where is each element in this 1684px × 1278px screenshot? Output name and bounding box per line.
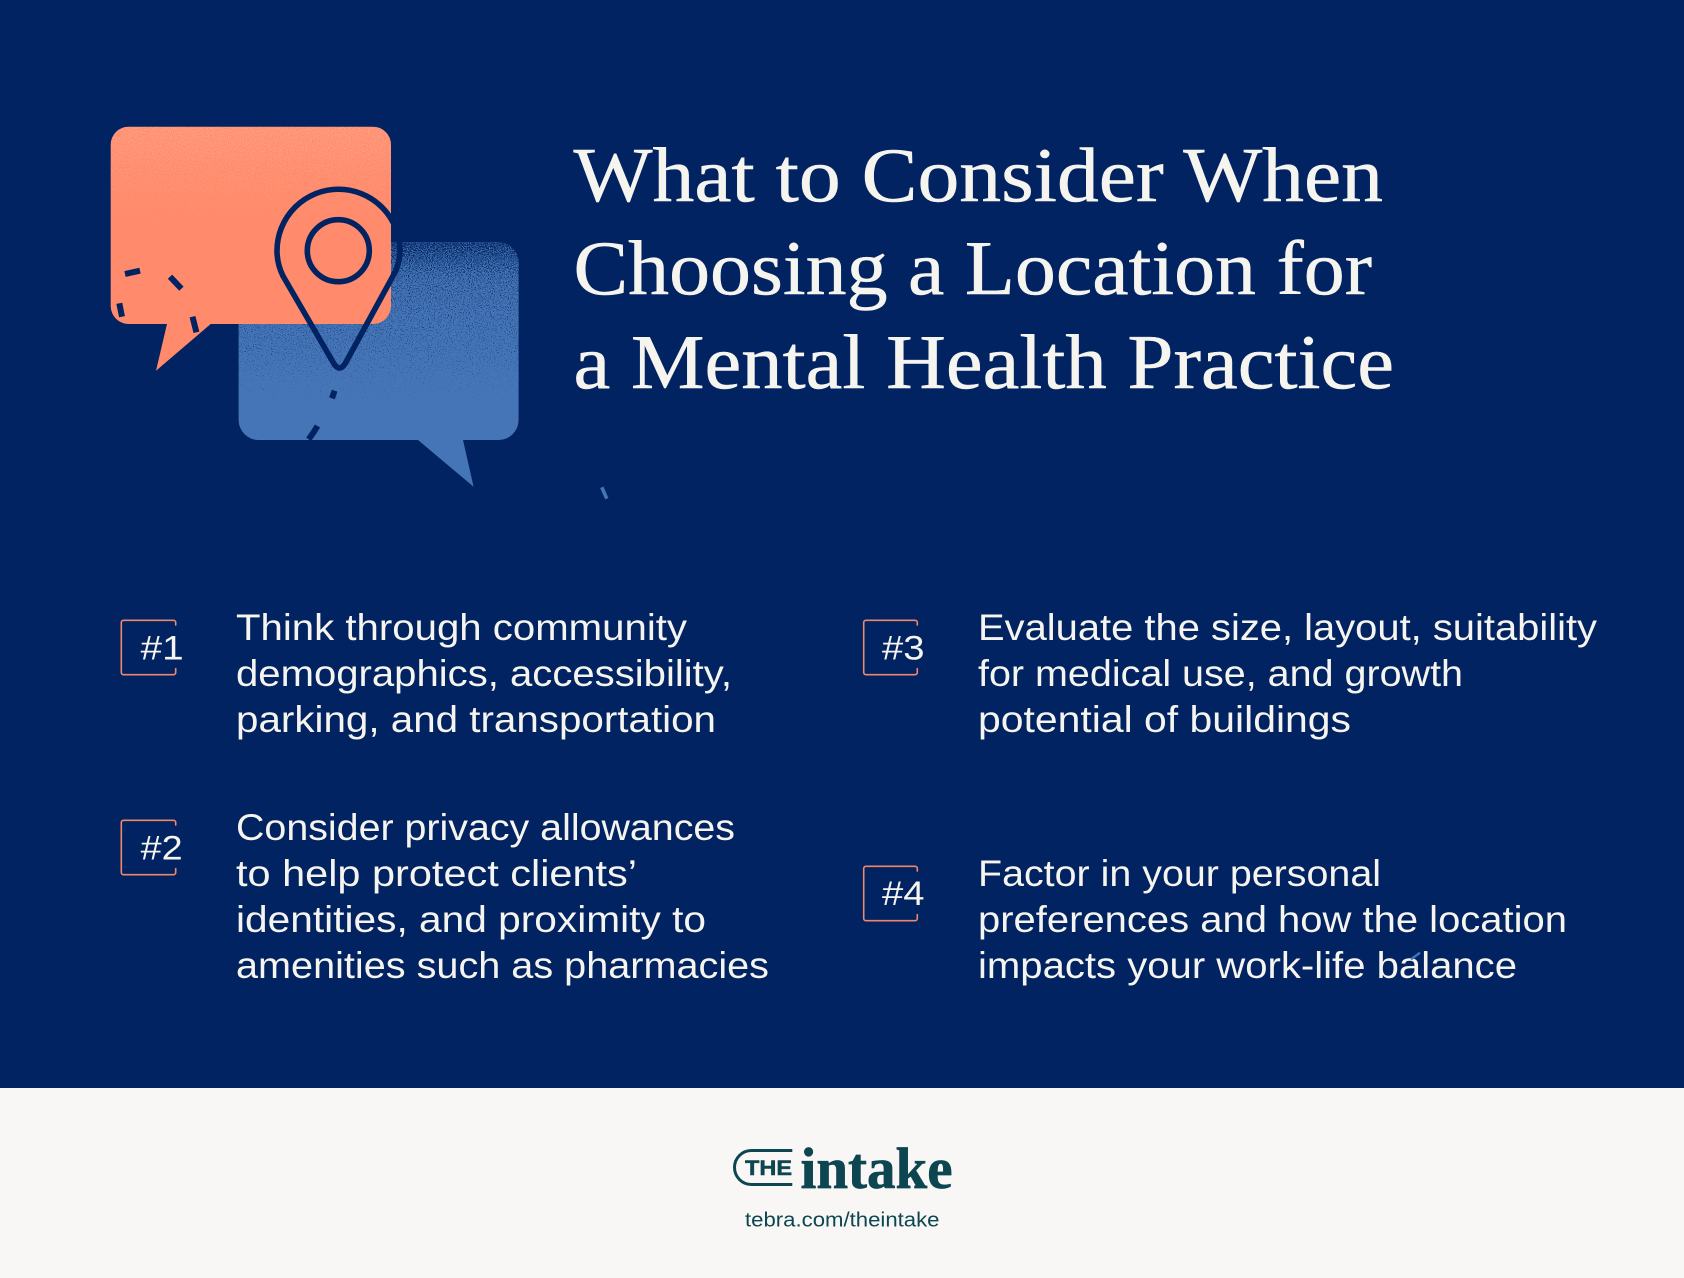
title: a Mental Health Practice bbox=[574, 319, 1394, 405]
badge: #4 bbox=[864, 866, 924, 921]
icon: location pin bbox=[277, 189, 400, 368]
small blue accent stroke bbox=[1411, 953, 1420, 959]
badge: #4: #4 bbox=[882, 875, 924, 913]
badge: #2: #2 bbox=[141, 829, 183, 867]
logo: the intake bbox=[734, 1136, 952, 1201]
text: item 1 bbox=[236, 607, 732, 740]
text: item 3 bbox=[978, 607, 1598, 740]
text: item 2: to help protect clients’ bbox=[236, 853, 637, 894]
badge: #2 bbox=[121, 820, 183, 875]
badge: #3 bbox=[864, 620, 924, 675]
title: Choosing a Location for bbox=[574, 225, 1372, 311]
badge: #3: #3 bbox=[882, 629, 924, 667]
dashed route around bubbles bbox=[119, 271, 335, 439]
text: item 1: parking, and transportation bbox=[236, 699, 716, 740]
badge: #1 bbox=[121, 620, 184, 675]
text: item 1: Think through community bbox=[236, 607, 688, 648]
title: What to Consider When bbox=[574, 132, 1383, 218]
item 4 bbox=[864, 853, 1567, 986]
text: item 1: demographics, accessibility, bbox=[236, 653, 732, 694]
logo pill outline bbox=[734, 1150, 792, 1184]
item 1 bbox=[121, 607, 732, 740]
badge: #1: #1 bbox=[141, 629, 184, 667]
text: item 2: Consider privacy allowances bbox=[236, 807, 735, 848]
icon: orange speech bubble bbox=[111, 127, 391, 371]
text: item 3: for medical use, and growth bbox=[978, 653, 1463, 694]
text: item 4: Factor in your personal bbox=[978, 853, 1381, 894]
panel: footer bbox=[0, 1088, 1684, 1278]
logo word: the: THE bbox=[745, 1156, 792, 1180]
text: item 2: identities, and proximity to bbox=[236, 899, 706, 940]
text: item 2: amenities such as pharmacies bbox=[236, 945, 769, 986]
logo word: intake: intake bbox=[800, 1136, 952, 1201]
icon: blue speech bubble bbox=[239, 242, 519, 487]
text: item 4 bbox=[978, 853, 1567, 986]
small blue dash bbox=[602, 487, 607, 499]
text: item 4: impacts your work-life balance bbox=[978, 945, 1517, 986]
text: item 4: preferences and how the location bbox=[978, 899, 1567, 940]
footer url: tebra.com/theintake bbox=[745, 1210, 940, 1232]
text: item 2 bbox=[236, 807, 769, 986]
item 2 bbox=[121, 807, 769, 986]
text: item 3: potential of buildings bbox=[978, 699, 1351, 740]
title bbox=[574, 132, 1394, 405]
text: item 3: Evaluate the size, layout, suitability bbox=[978, 607, 1598, 648]
illustration: speech bubbles with location pin bbox=[111, 127, 607, 499]
item 3 bbox=[864, 607, 1598, 740]
